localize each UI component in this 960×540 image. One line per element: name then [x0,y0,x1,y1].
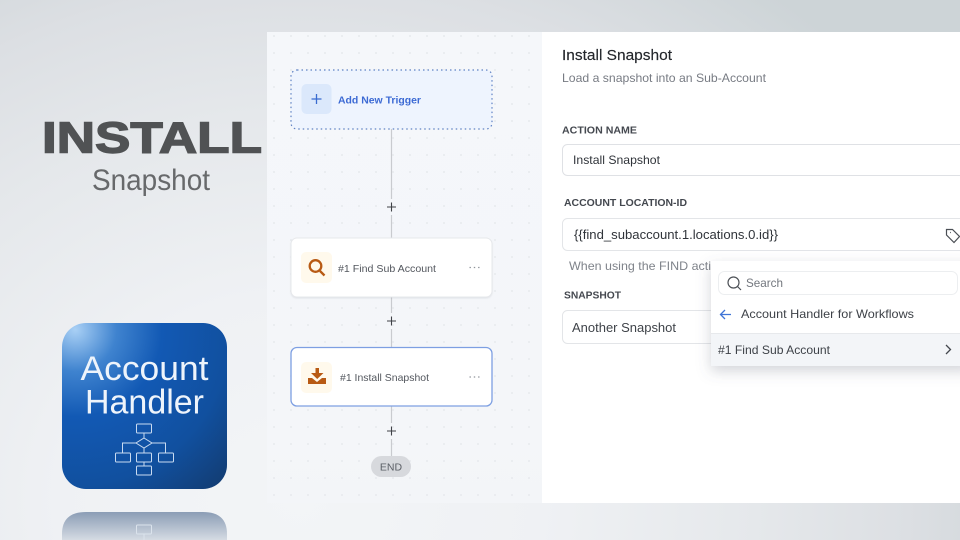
field label: snapshot: SNAPSHOT [564,290,621,302]
menu dots [470,376,480,378]
node: END [371,456,411,477]
icon reflection [62,512,227,540]
title: INSTALL Snapshot [42,114,262,197]
dropdown: variable picker [711,261,960,366]
node: #1 Install Snapshot: #1 Install Snapshot [340,372,429,384]
node: END: END [380,462,403,474]
node: #1 Install Snapshot [291,348,492,406]
menu dots [470,266,480,268]
panel: workflow canvas [267,32,542,503]
helper text: When using the FIND acti [569,259,711,273]
field: snapshot: Another Snapshot [572,321,677,335]
field: action name: Install Snapshot [573,153,661,167]
back row: Account Handler for Workflows [741,307,914,321]
field: action name [562,144,960,176]
field label: account location id: ACCOUNT LOCATION-ID [564,198,687,209]
search box [718,272,958,294]
title: INSTALL Snapshot: INSTALL [42,114,262,162]
icon: download [308,368,326,384]
icon: Account Handler app tile [62,323,227,489]
icon: tag [946,230,960,242]
icon: flowchart [116,424,174,475]
icon: Account Handler app tile: Handler [85,384,204,422]
list row [718,343,950,357]
panel: Install Snapshot form [542,32,960,503]
form subheading: Load a snapshot into an Sub-Account [562,71,767,85]
search box: Search [746,276,783,290]
add button: plus [387,202,396,436]
node: Add New Trigger [291,70,492,129]
list row: #1 Find Sub Account [718,343,831,357]
field label: action name: ACTION NAME [562,126,637,136]
node: #1 Find Sub Account: #1 Find Sub Account [338,263,436,275]
title: INSTALL Snapshot: Snapshot [92,164,211,197]
form heading: Install Snapshot [562,47,673,64]
field: account location id [562,218,960,250]
field: snapshot [562,310,732,344]
icon: search [310,260,324,276]
node: #1 Find Sub Account [291,238,492,297]
field: account location id: {{find_subaccount.1.locations.0.id}} [574,228,778,242]
icon: Account Handler app tile: Account [80,350,209,388]
node: Add New Trigger: Add New Trigger [338,94,421,106]
